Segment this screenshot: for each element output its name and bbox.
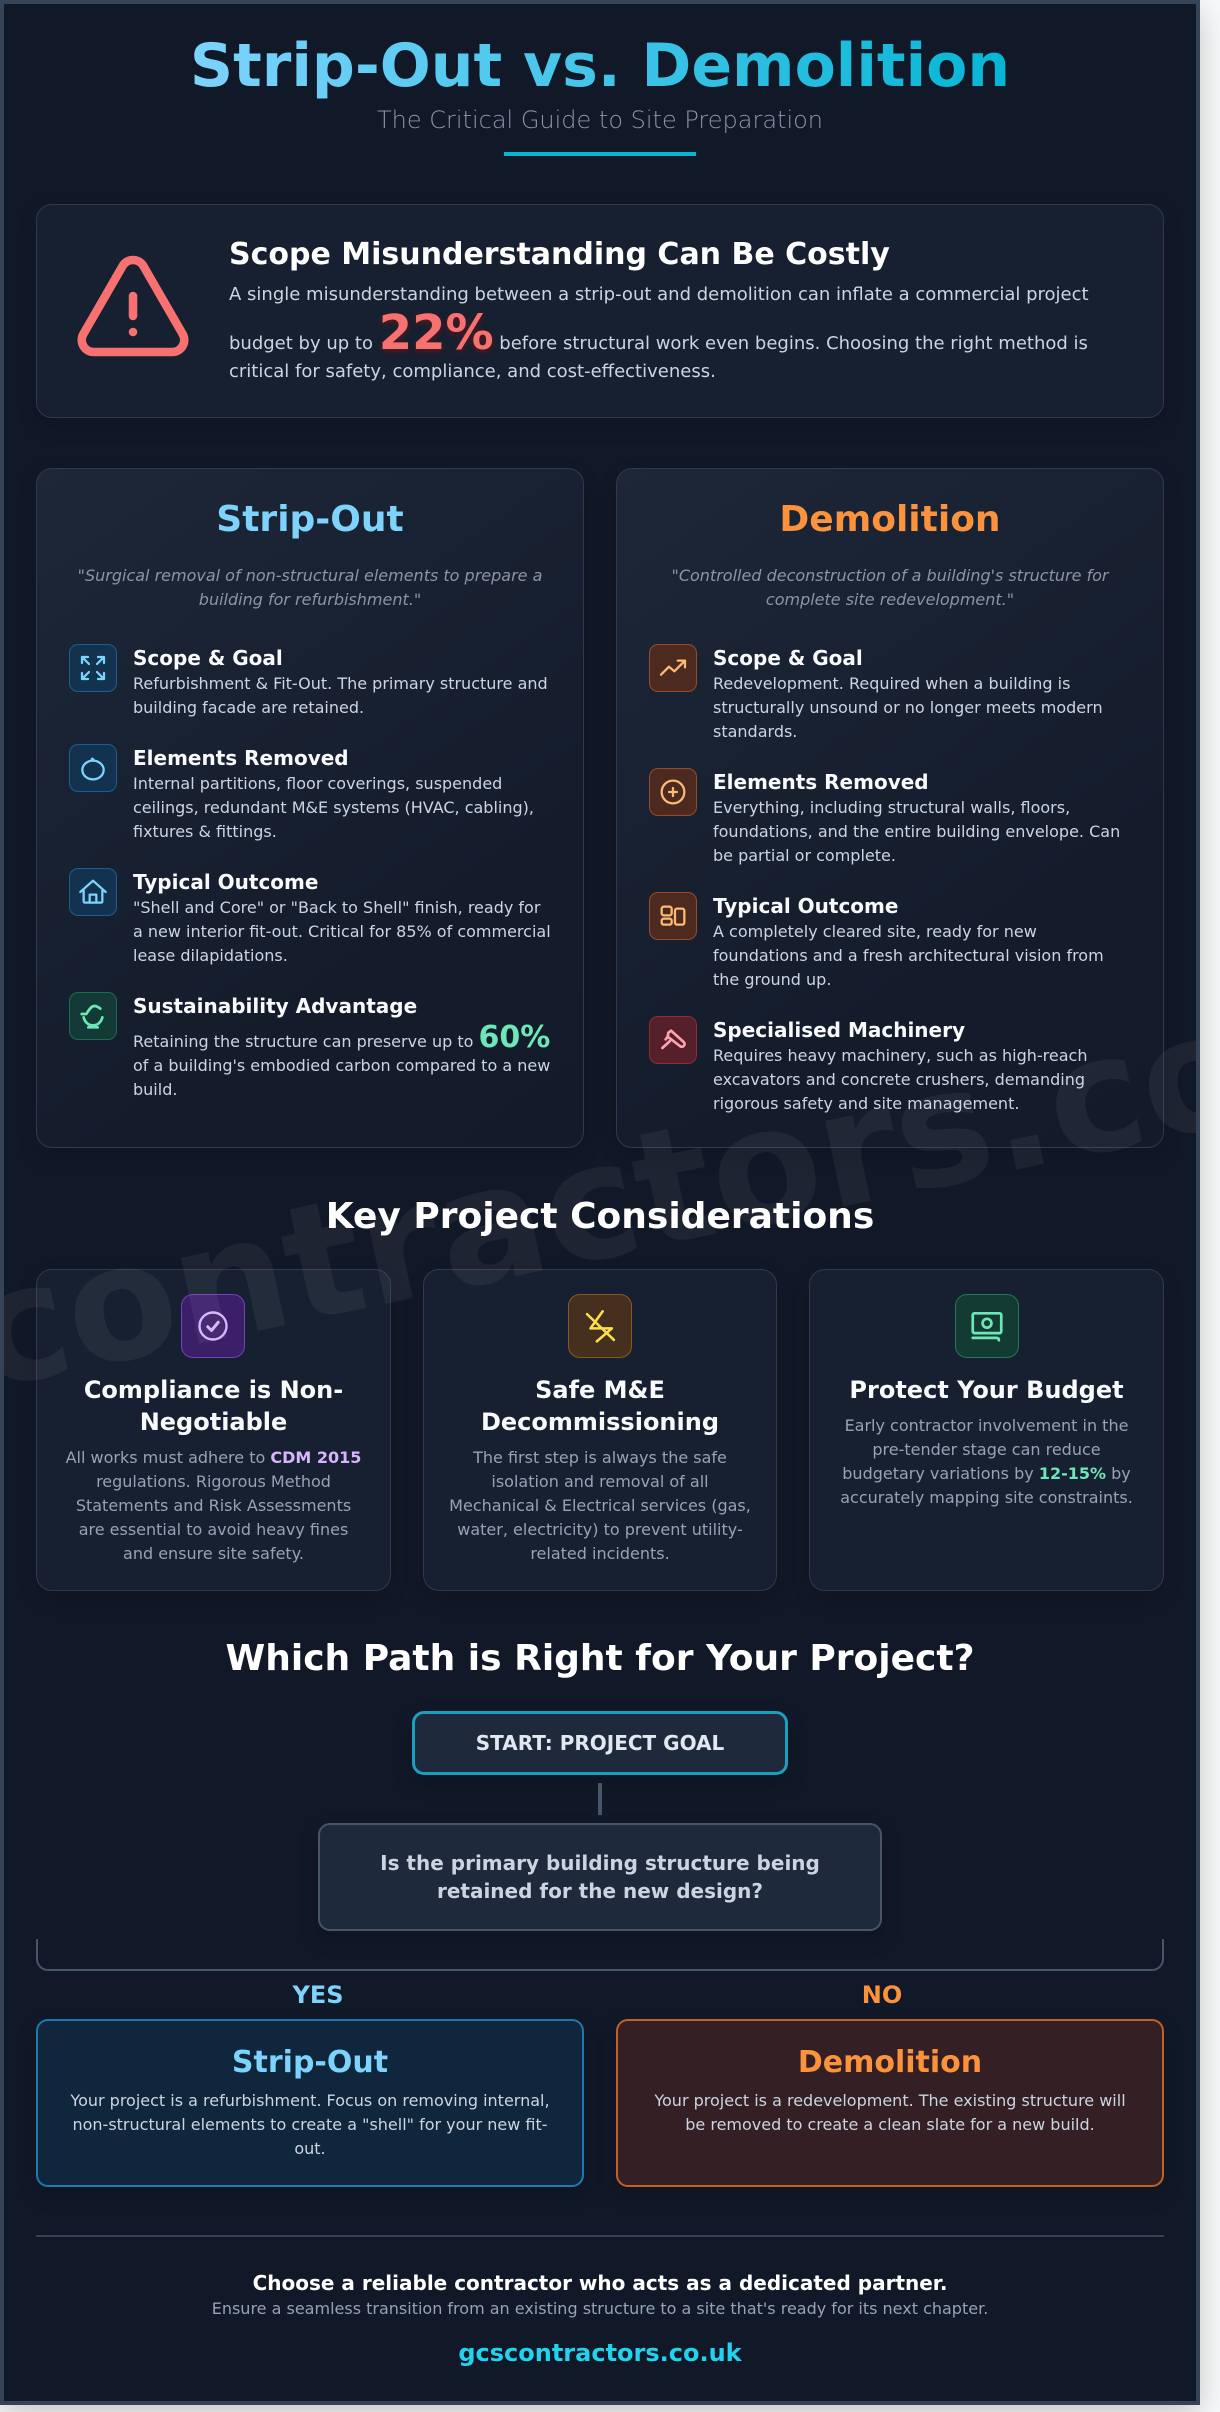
panel: safe M&E bbox=[423, 1269, 777, 1591]
item heading: Specialised Machinery bbox=[713, 1018, 965, 1042]
item: scope and goal bbox=[69, 644, 548, 717]
item text: Internal partitions, floor coverings, suspended bbox=[133, 774, 502, 793]
subtitle: The Critical Guide to Site Preparation bbox=[377, 106, 823, 134]
section heading: considerations: Key Project Considerations bbox=[326, 1196, 874, 1237]
item text: Redevelopment. Required when a building is bbox=[713, 674, 1070, 693]
strip-out quote: building for refurbishment." bbox=[199, 590, 421, 609]
item text: Retaining the structure can preserve up to 60% bbox=[133, 1020, 550, 1055]
warning body text: A single misunderstanding between a strip-out and demolition can inflate a commercial project bbox=[229, 284, 1089, 305]
item text: Requires heavy machinery, such as high-reach bbox=[713, 1046, 1087, 1065]
title underline bbox=[504, 152, 696, 156]
icon: recycle arcs bbox=[69, 992, 117, 1040]
panel: strip-out bbox=[36, 468, 584, 1148]
flow node: start: START: PROJECT GOAL bbox=[476, 1731, 724, 1755]
demolition quote: complete site redevelopment." bbox=[766, 590, 1014, 609]
result text: out. bbox=[294, 2139, 326, 2158]
item text: "Shell and Core" or "Back to Shell" finish, ready for bbox=[133, 898, 540, 917]
flow connector bbox=[598, 1783, 602, 1815]
item: typical outcome bbox=[649, 892, 1104, 989]
item: specialised machinery bbox=[649, 1016, 1087, 1113]
result panel: demolition bbox=[616, 2019, 1164, 2187]
compliance text: Statements and Risk Assessments bbox=[76, 1496, 351, 1515]
item heading: Typical Outcome bbox=[713, 894, 898, 918]
budget text: accurately mapping site constraints. bbox=[840, 1488, 1133, 1507]
warning body text: budget by up to 22% before structural work even begins. Choosing the right method is bbox=[229, 305, 1088, 361]
footer subline: Ensure a seamless transition from an existing structure to a site that's ready for its next chapter. bbox=[212, 2299, 988, 2318]
item text: standards. bbox=[713, 722, 797, 741]
flow node: question: Is the primary building structure being bbox=[380, 1851, 820, 1875]
item text bbox=[133, 774, 534, 841]
flow node: start bbox=[412, 1711, 788, 1775]
item heading: Scope & Goal bbox=[133, 646, 283, 670]
item text: excavators and concrete crushers, demanding bbox=[713, 1070, 1085, 1089]
panel: scope warning bbox=[36, 204, 1164, 418]
warning heading: Scope Misunderstanding Can Be Costly bbox=[229, 237, 890, 272]
item text: build. bbox=[133, 1080, 177, 1099]
item text: fixtures & fittings. bbox=[133, 822, 277, 841]
footer headline: Choose a reliable contractor who acts as a dedicated partner. bbox=[253, 2271, 947, 2295]
warning body text: critical for safety, compliance, and cost-effectiveness. bbox=[229, 361, 716, 382]
result panel: strip-out bbox=[36, 2019, 584, 2187]
item text: rigorous safety and site management. bbox=[713, 1094, 1019, 1113]
warning body text bbox=[229, 284, 1089, 382]
safe M&E text: Mechanical & Electrical services (gas, bbox=[449, 1496, 751, 1515]
icon: ring bbox=[69, 744, 117, 792]
safe M&E text: water, electricity) to prevent utility- bbox=[457, 1520, 743, 1539]
item text: A completely cleared site, ready for new bbox=[713, 922, 1037, 941]
demolition heading: Demolition bbox=[779, 499, 1001, 540]
icon: layout blocks bbox=[649, 892, 697, 940]
item: sustainability advantage bbox=[69, 992, 550, 1099]
safe M&E heading: Decommissioning bbox=[481, 1408, 719, 1436]
compliance text: regulations. Rigorous Method bbox=[96, 1472, 331, 1491]
icon: banknote bbox=[955, 1294, 1019, 1358]
panel: budget bbox=[809, 1269, 1164, 1591]
result text: Your project is a refurbishment. Focus on removing internal, bbox=[70, 2091, 550, 2110]
item text bbox=[133, 674, 548, 717]
item text bbox=[713, 674, 1103, 741]
item text: ceilings, redundant M&E systems (HVAC, cabling), bbox=[133, 798, 534, 817]
item text bbox=[133, 898, 551, 965]
icon: house bbox=[69, 868, 117, 916]
item heading: Sustainability Advantage bbox=[133, 994, 417, 1018]
budget text bbox=[840, 1416, 1133, 1507]
item heading: Elements Removed bbox=[713, 770, 929, 794]
item: scope and goal bbox=[649, 644, 1103, 741]
item text bbox=[713, 798, 1120, 865]
budget text: Early contractor involvement in the bbox=[845, 1416, 1128, 1435]
item text bbox=[713, 1046, 1087, 1113]
budget text: pre-tender stage can reduce bbox=[872, 1440, 1101, 1459]
item text: foundations and a fresh architectural vision from bbox=[713, 946, 1104, 965]
item text: be partial or complete. bbox=[713, 846, 896, 865]
safe M&E heading: Safe M&E bbox=[535, 1376, 665, 1404]
item heading: Typical Outcome bbox=[133, 870, 318, 894]
item: elements removed bbox=[649, 768, 1120, 865]
icon: hammer bbox=[649, 1016, 697, 1064]
compliance text: and ensure site safety. bbox=[123, 1544, 304, 1563]
page title: Strip-Out vs. Demolition bbox=[190, 31, 1010, 101]
item text: the ground up. bbox=[713, 970, 831, 989]
branch label: yes: YES bbox=[292, 1981, 344, 2009]
strip-out quote: "Surgical removal of non-structural elements to prepare a bbox=[78, 566, 542, 585]
section heading: decision path: Which Path is Right for Your Project? bbox=[226, 1638, 974, 1679]
flow node: question bbox=[318, 1823, 882, 1931]
strip-out heading: Strip-Out bbox=[216, 499, 404, 540]
item text: building facade are retained. bbox=[133, 698, 364, 717]
item: elements removed bbox=[69, 744, 534, 841]
item text: foundations, and the entire building envelope. Can bbox=[713, 822, 1120, 841]
item heading: Elements Removed bbox=[133, 746, 349, 770]
icon: bolt slash bbox=[568, 1294, 632, 1358]
result text bbox=[70, 2091, 550, 2158]
icon: expand arrows bbox=[69, 644, 117, 692]
compliance heading: Negotiable bbox=[140, 1408, 287, 1436]
compliance heading: Compliance is Non- bbox=[84, 1376, 343, 1404]
compliance text: are essential to avoid heavy fines bbox=[79, 1520, 348, 1539]
item text: of a building's embodied carbon compared to a new bbox=[133, 1056, 550, 1075]
compliance text: All works must adhere to CDM 2015 bbox=[66, 1448, 361, 1467]
icon: plus circle bbox=[649, 768, 697, 816]
result heading: Strip-Out bbox=[232, 2045, 388, 2080]
flow node: question: retained for the new design? bbox=[437, 1879, 763, 1903]
compliance text bbox=[66, 1448, 361, 1563]
flow branch bracket bbox=[36, 1939, 1164, 1971]
budget text: budgetary variations by 12-15% by bbox=[842, 1464, 1131, 1483]
panel: compliance bbox=[36, 1269, 391, 1591]
result text bbox=[654, 2091, 1126, 2134]
budget heading: Protect Your Budget bbox=[849, 1376, 1124, 1404]
item text: lease dilapidations. bbox=[133, 946, 288, 965]
safe M&E text: isolation and removal of all bbox=[491, 1472, 709, 1491]
item heading: Scope & Goal bbox=[713, 646, 863, 670]
icon: check circle bbox=[181, 1294, 245, 1358]
compliance heading bbox=[84, 1376, 343, 1436]
result text: Your project is a redevelopment. The existing structure will bbox=[654, 2091, 1126, 2110]
item text: structurally unsound or no longer meets modern bbox=[713, 698, 1103, 717]
icon: warning triangle bbox=[78, 256, 188, 356]
item text: Refurbishment & Fit-Out. The primary structure and bbox=[133, 674, 548, 693]
icon: trend arrow bbox=[649, 644, 697, 692]
footer website: gcscontractors.co.uk bbox=[458, 2339, 742, 2367]
result text: be removed to create a clean slate for a new build. bbox=[685, 2115, 1095, 2134]
item text bbox=[713, 922, 1104, 989]
safe M&E text: related incidents. bbox=[530, 1544, 670, 1563]
item: typical outcome bbox=[69, 868, 551, 965]
result text: non-structural elements to create a "shell" for your new fit- bbox=[72, 2115, 548, 2134]
branch label: no: NO bbox=[862, 1981, 902, 2009]
safe M&E heading bbox=[481, 1376, 719, 1436]
demolition quote: "Controlled deconstruction of a building's structure for bbox=[671, 566, 1108, 585]
safe M&E text bbox=[449, 1448, 751, 1563]
safe M&E text: The first step is always the safe bbox=[473, 1448, 727, 1467]
panel: demolition bbox=[616, 468, 1164, 1148]
strip-out quote bbox=[78, 566, 542, 609]
result heading: Demolition bbox=[798, 2045, 982, 2080]
item text: a new interior fit-out. Critical for 85% of commercial bbox=[133, 922, 551, 941]
item text bbox=[133, 1020, 550, 1099]
item text: Everything, including structural walls, floors, bbox=[713, 798, 1070, 817]
demolition quote bbox=[671, 566, 1110, 609]
